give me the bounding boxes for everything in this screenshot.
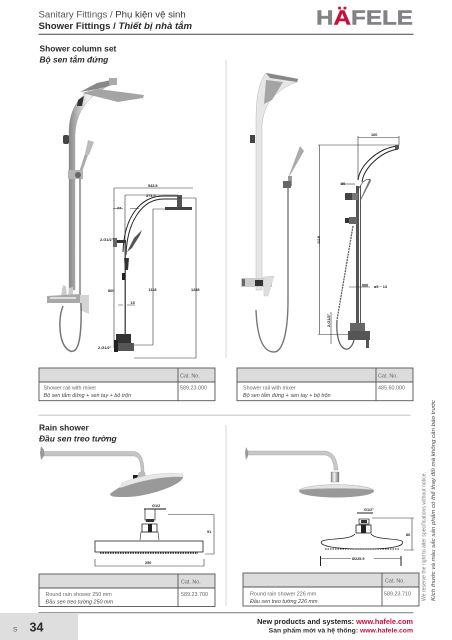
diagram: shower column set 1	[98, 184, 199, 358]
heading: rain shower: Rain shower	[39, 422, 90, 432]
footer: website text: New products and systems: www.hafele.com	[257, 617, 414, 626]
table: round rain shower 226	[243, 573, 419, 606]
side note: Kích thước và màu sắc sản phẩm có thể thay đổi mà không cần báo trước	[430, 400, 437, 601]
diagram: shower column set 2: 160	[371, 133, 377, 137]
diagram: rain shower 250: 250	[145, 561, 151, 565]
diagram: rain shower 226: G1/2"	[364, 508, 374, 512]
diagram: rain shower 250	[95, 504, 214, 566]
diagram: shower column set 1: 1118	[148, 288, 157, 292]
table: round rain shower 226: 589.23.710	[384, 592, 411, 598]
diagram: shower column set 2: ø5 ~ 13	[374, 285, 387, 289]
table: round rain shower 250	[39, 574, 215, 606]
diagram: shower column set 1: 2-G1/2"	[98, 346, 112, 350]
table: round rain shower 250: 589.23.700	[181, 592, 208, 598]
table: shower rail 589.23.000: Shower rail with mixer	[44, 386, 96, 392]
photo: rain shower 250	[40, 446, 183, 497]
table: shower rail 485.60.000: Bộ sen tắm đứng + sen tay + bộ trộn	[243, 392, 331, 399]
table: shower rail 589.23.000	[39, 368, 215, 401]
table: round rain shower 226: Đầu sen treo tường 226 mm	[250, 599, 318, 605]
photo: rain shower 226	[245, 447, 374, 498]
heading: rain shower	[39, 422, 117, 444]
table: round rain shower 250: Round rain shower 250 mm	[46, 592, 112, 598]
side note	[422, 400, 437, 601]
table: round rain shower 226: Cat. No.	[385, 578, 405, 584]
footer: page number: S	[13, 626, 18, 634]
diagram: shower column set 1: 1288	[191, 288, 199, 292]
diagram: rain shower 226: 86	[406, 533, 410, 537]
diagram: shower column set 2: 2-G1/2"	[327, 313, 331, 327]
page header: Sanitary Fittings / Phụ kiện vệ sinh	[38, 10, 186, 20]
table: round rain shower 250: Cat. No.	[181, 580, 201, 586]
diagram: rain shower 226	[320, 508, 414, 566]
table: shower rail 485.60.000	[237, 368, 413, 401]
heading: shower column set: Shower column set	[40, 44, 116, 54]
footer: website text	[257, 617, 414, 634]
heading: shower column set: Bộ sen tắm đứng	[40, 54, 108, 64]
heading: rain shower: Đầu sen treo tường	[39, 434, 117, 444]
diagram: shower column set 1: 2-G1/2"	[100, 238, 114, 242]
table: round rain shower 226: Round rain shower 226 mm	[250, 592, 317, 598]
table: shower rail 589.23.000: 589.23.000	[180, 386, 207, 392]
photo: shower column set 1	[47, 78, 144, 351]
heading: shower column set	[40, 44, 116, 64]
footer: website text: Sản phẩm mới và hệ thống: www.hafele.com	[269, 626, 413, 634]
diagram: rain shower 250: G1/2	[152, 504, 160, 508]
separators	[226, 60, 227, 358]
diagram: shower column set 2: 80	[341, 182, 345, 186]
diagram: rain shower 250: 91	[207, 530, 211, 534]
diagram: rain shower 226: Ø225.9	[352, 557, 364, 561]
table: shower rail 485.60.000: Shower rail with mixer	[243, 386, 296, 392]
diagram: shower column set 1: 543.5	[148, 184, 158, 188]
logo: Hafele: HÄFELE	[316, 7, 413, 30]
diagram: shower column set 2: 1118	[317, 236, 321, 244]
page header	[38, 10, 414, 35]
table: shower rail 589.23.000: Bộ sen tắm đứng + sen tay + bộ trộn	[44, 392, 131, 399]
diagram: shower column set 1: 373.5	[146, 194, 156, 198]
table: round rain shower 250: Đầu sen treo tường 250 mm	[46, 600, 114, 606]
table: shower rail 485.60.000: 485.60.000	[378, 386, 405, 392]
diagram: shower column set 1: 15	[130, 301, 135, 305]
diagram: shower column set 2	[317, 133, 399, 349]
table: shower rail 589.23.000: Cat. No.	[180, 374, 200, 380]
footer: page number: 34	[30, 620, 43, 634]
diagram: shower column set 1: 77	[117, 206, 121, 210]
table: shower rail 485.60.000: Cat. No.	[378, 374, 398, 380]
photo: shower column set 2	[241, 73, 304, 352]
footer: page number	[0, 612, 414, 640]
page header: Shower Fittings / Thiết bị nhà tắm	[38, 20, 192, 32]
side note: We reserve the right to alter specifications without notice.	[422, 472, 428, 601]
diagram: shower column set 1: 800	[108, 289, 114, 293]
